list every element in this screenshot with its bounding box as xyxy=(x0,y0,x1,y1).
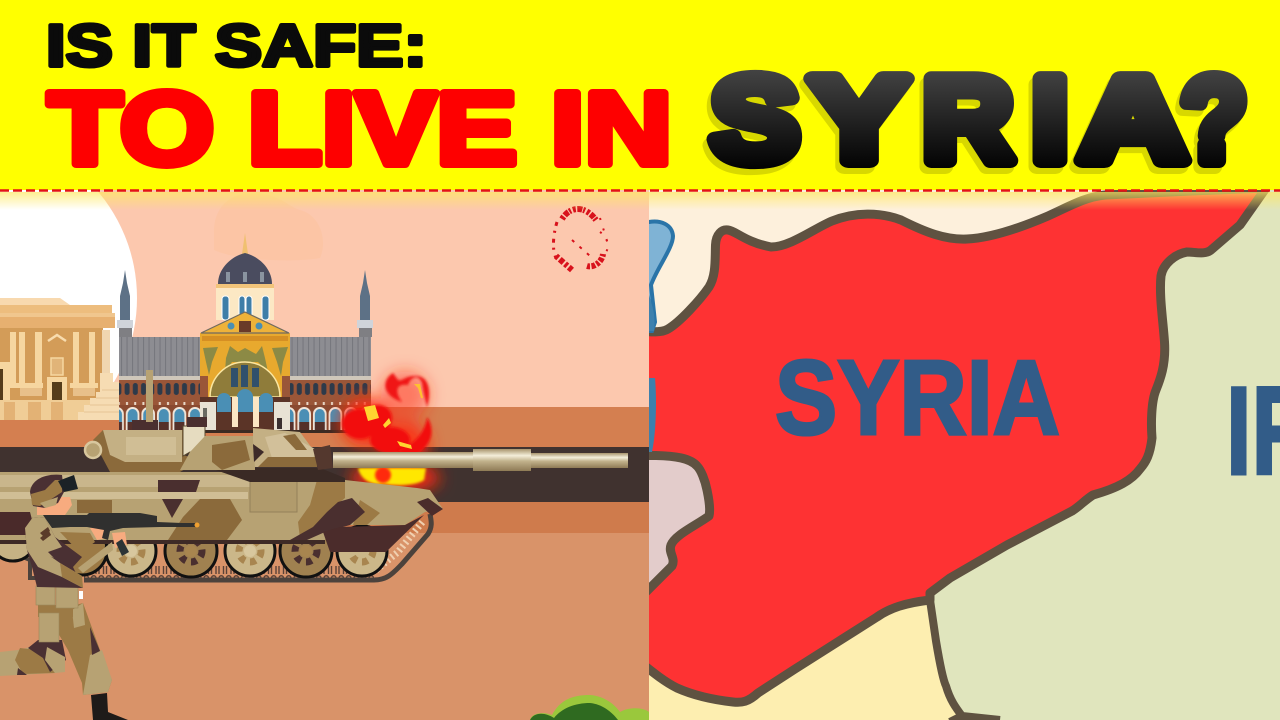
title: Syria: Y xyxy=(810,54,908,186)
map label: Syria: SYRIA xyxy=(775,339,1060,457)
hull hatch panel xyxy=(250,475,297,512)
map: Jordan xyxy=(640,600,962,720)
tracks xyxy=(0,514,431,580)
ground bands xyxy=(0,407,649,720)
minarets xyxy=(117,270,373,337)
panel: war scene xyxy=(0,133,649,720)
flame crescents xyxy=(385,373,429,407)
debris ring xyxy=(553,209,608,270)
title: Syria: S xyxy=(711,54,799,186)
dome xyxy=(216,233,274,320)
cloud xyxy=(214,193,323,260)
hips and pouches xyxy=(36,586,83,642)
boot xyxy=(91,693,128,720)
torso xyxy=(25,517,83,588)
head xyxy=(30,475,78,515)
title: Syria: R xyxy=(923,54,1013,186)
temple ruin xyxy=(0,298,119,420)
soldier xyxy=(0,475,200,720)
dashed divider xyxy=(0,189,1280,192)
hull xyxy=(0,472,443,552)
back leg xyxy=(0,640,66,676)
hull camo right xyxy=(298,480,345,538)
gold facade xyxy=(200,333,290,404)
map: sea and Cyprus xyxy=(640,222,673,452)
track skirt xyxy=(323,515,424,552)
map: Lebanon xyxy=(640,455,709,598)
turret xyxy=(85,370,345,482)
wheels xyxy=(0,515,387,577)
sky xyxy=(0,190,649,408)
mosque xyxy=(117,233,373,433)
sun xyxy=(0,133,137,463)
roofs xyxy=(119,337,200,376)
map: Iraq xyxy=(930,190,1280,720)
map: Iraq Jordan border xyxy=(930,600,1000,720)
gold facade arch xyxy=(210,362,280,397)
title: Syria xyxy=(711,54,1247,186)
header banner xyxy=(0,0,1280,190)
gold facade trees xyxy=(203,346,288,376)
mantlet xyxy=(313,445,333,470)
title: Syria: ? xyxy=(1181,54,1247,186)
map: Syria territory xyxy=(640,188,1266,702)
title: Syria: A xyxy=(1079,54,1187,186)
front leg xyxy=(58,603,112,695)
bush xyxy=(530,695,649,720)
panel: map of Syria xyxy=(640,188,1280,720)
explosion xyxy=(341,371,440,492)
entrance arches xyxy=(200,389,290,432)
title line 1: IS IT SAFE: xyxy=(46,13,427,79)
header fade xyxy=(0,192,1280,210)
rifle xyxy=(43,513,200,556)
gun barrel xyxy=(333,449,628,471)
tank xyxy=(0,370,628,580)
title line 2: TO LIVE IN xyxy=(48,71,672,186)
arm xyxy=(60,527,127,573)
title: Syria: I xyxy=(1032,54,1068,186)
flame highlights xyxy=(364,405,412,449)
